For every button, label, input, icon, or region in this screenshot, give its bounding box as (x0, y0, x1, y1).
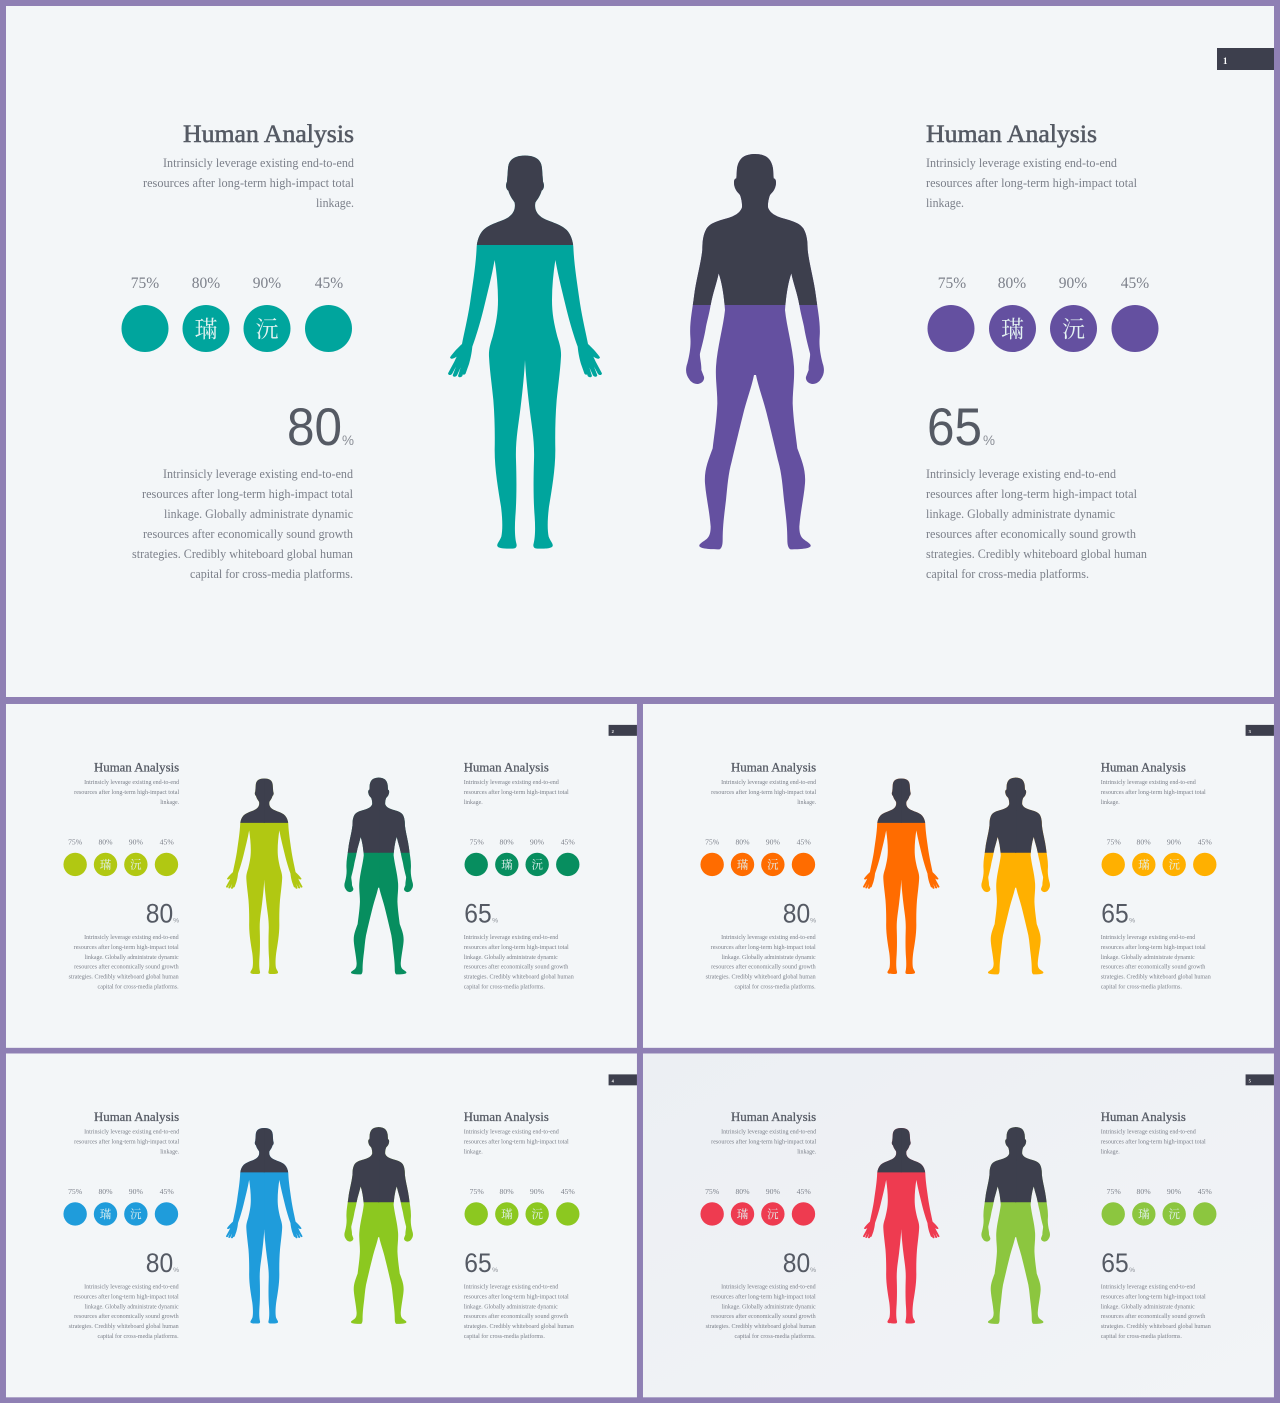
right body text: linkage. Globally administrate dynamic (464, 954, 558, 961)
right body text (1101, 1283, 1211, 1340)
right percentage circles: 沅 (1062, 317, 1085, 342)
left percentage circles (700, 837, 815, 876)
right body text: resources after long-term high-impact total (464, 944, 569, 951)
left percentage circles: 璊 (194, 317, 218, 342)
left percentage circles: 45% (160, 1187, 174, 1196)
left body text: linkage. Globally administrate dynamic (85, 954, 179, 961)
left percentage circles: 75% (68, 1187, 83, 1196)
left body text: strategies. Credibly whiteboard global human (132, 546, 353, 561)
right percentage circles: 90% (530, 837, 545, 846)
panel: slide 1 (6, 6, 1274, 697)
left body text: linkage. Globally administrate dynamic (85, 1303, 179, 1310)
right big number: 65 (1101, 898, 1129, 928)
female body figure (226, 778, 303, 974)
right percentage circles: 45% (1198, 1187, 1212, 1196)
left percentage circles: 75% (705, 837, 720, 846)
right body text: resources after long-term high-impact total (926, 486, 1137, 501)
right percentage circles (928, 275, 1158, 352)
right body text: capital for cross-media platforms. (1101, 1333, 1182, 1340)
right intro text: linkage. (926, 195, 964, 210)
left percentage circles: 90% (129, 1187, 143, 1196)
male body figure (344, 778, 413, 974)
right body text: linkage. Globally administrate dynamic (464, 1303, 558, 1310)
left intro text (711, 779, 817, 806)
panel: slide 4 blue and green (6, 1053, 637, 1397)
right body text: linkage. Globally administrate dynamic (1101, 1303, 1195, 1310)
female body figure (226, 1128, 303, 1324)
left big number: % (810, 1267, 816, 1274)
right body text: linkage. Globally administrate dynamic (1101, 954, 1195, 961)
right percentage circles: 90% (1059, 275, 1087, 292)
left percentage circles (63, 1187, 178, 1226)
right percentage circles: 璊 (1138, 1207, 1150, 1221)
left percentage circles (700, 1187, 815, 1226)
panel: slide 5 red and green (643, 1053, 1274, 1397)
male body figure (981, 1127, 1050, 1324)
left body text: Intrinsicly leverage existing end-to-end (84, 934, 179, 941)
left body text: strategies. Credibly whiteboard global human (706, 1323, 816, 1330)
left percentage circles: 璊 (100, 1207, 112, 1221)
right percentage circles: 75% (938, 275, 966, 292)
left body text (706, 1283, 816, 1340)
left body text: resources after long-term high-impact total (711, 944, 816, 951)
left body text: strategies. Credibly whiteboard global human (69, 974, 179, 981)
right percentage circles (1102, 837, 1216, 876)
right body text: Intrinsicly leverage existing end-to-end (1101, 934, 1196, 941)
left body text: resources after economically sound growth (711, 964, 816, 971)
right body text: Intrinsicly leverage existing end-to-end (1101, 1283, 1196, 1290)
right big number: % (1129, 1267, 1135, 1274)
left intro text: resources after long-term high-impact total (74, 1139, 179, 1146)
left heading: Human Analysis (731, 761, 816, 775)
right big number: 65 (1101, 1248, 1129, 1278)
page tag 3 (1246, 725, 1274, 736)
left big number: % (173, 1267, 179, 1274)
right intro text (926, 155, 1137, 210)
right percentage circles: 90% (1167, 837, 1182, 846)
left percentage circles: 璊 (737, 858, 749, 872)
page tag 2: 2 (612, 729, 615, 734)
right big number: 65 (927, 398, 982, 457)
left percentage circles: 璊 (737, 1207, 749, 1221)
right intro text: resources after long-term high-impact total (464, 1139, 569, 1146)
right percentage circles: 90% (1167, 1187, 1182, 1196)
right heading: Human Analysis (464, 1110, 549, 1124)
right percentage circles: 80% (1137, 1187, 1151, 1196)
page tag 1: 1 (1223, 56, 1228, 66)
left percentage circles: 80% (98, 837, 113, 846)
left percentage circles: 45% (797, 837, 811, 846)
left intro text: resources after long-term high-impact total (143, 175, 354, 190)
right body text: Intrinsicly leverage existing end-to-end (464, 1283, 559, 1290)
right percentage circles: 45% (1121, 275, 1149, 292)
left percentage circles: 沅 (767, 1208, 779, 1221)
left body text (69, 1283, 179, 1340)
left body text: capital for cross-media platforms. (98, 1333, 179, 1340)
page tag 1 (1217, 48, 1274, 70)
right body text: resources after economically sound growth (464, 964, 569, 971)
left intro text (711, 1129, 817, 1156)
right percentage circles: 45% (561, 1187, 575, 1196)
left body text (706, 934, 816, 991)
left percentage circles: 80% (735, 1187, 750, 1196)
left big number: % (810, 917, 816, 924)
right big number: % (492, 917, 498, 924)
left body text (69, 934, 179, 991)
right percentage circles (465, 837, 579, 876)
left heading: Human Analysis (731, 1110, 816, 1124)
right body text: resources after economically sound growth (1101, 1313, 1206, 1320)
left percentage circles: 90% (766, 1187, 780, 1196)
right percentage circles: 沅 (531, 859, 543, 872)
right heading: Human Analysis (464, 761, 549, 775)
right intro text: Intrinsicly leverage existing end-to-end (1101, 779, 1197, 786)
left percentage circles: 45% (797, 1187, 811, 1196)
left intro text: linkage. (160, 1149, 180, 1156)
left big number: 80 (146, 1248, 173, 1278)
page tag 5 (1246, 1074, 1274, 1085)
female body figure (863, 1128, 940, 1324)
right intro text: Intrinsicly leverage existing end-to-end (926, 155, 1117, 170)
left percentage circles: 75% (131, 275, 159, 292)
left intro text: Intrinsicly leverage existing end-to-end (721, 779, 817, 786)
left intro text (143, 155, 354, 210)
left big number: 80 (783, 1248, 810, 1278)
right body text: resources after long-term high-impact total (464, 1293, 569, 1300)
left heading: Human Analysis (183, 121, 354, 148)
right body text: resources after long-term high-impact total (1101, 944, 1206, 951)
left percentage circles: 璊 (100, 858, 112, 872)
left percentage circles: 80% (98, 1187, 113, 1196)
left percentage circles: 75% (68, 837, 83, 846)
right body text: linkage. Globally administrate dynamic (926, 506, 1115, 521)
right intro text: linkage. (1101, 1149, 1120, 1156)
left percentage circles: 75% (705, 1187, 720, 1196)
right intro text: Intrinsicly leverage existing end-to-end (1101, 1129, 1197, 1136)
right intro text: Intrinsicly leverage existing end-to-end (464, 779, 560, 786)
male body figure (686, 154, 824, 549)
left percentage circles (63, 837, 178, 876)
left big number: 80 (146, 898, 173, 928)
right body text: capital for cross-media platforms. (464, 984, 545, 991)
left body text: linkage. Globally administrate dynamic (164, 506, 353, 521)
left percentage circles: 80% (192, 275, 220, 292)
right heading: Human Analysis (1101, 761, 1186, 775)
left intro text: Intrinsicly leverage existing end-to-end (84, 779, 180, 786)
right intro text (464, 1129, 569, 1156)
right big number: % (492, 1267, 498, 1274)
right body text: strategies. Credibly whiteboard global human (1101, 974, 1211, 981)
right intro text: resources after long-term high-impact total (1101, 789, 1206, 796)
right percentage circles: 沅 (1168, 1208, 1180, 1221)
left intro text: linkage. (797, 1149, 817, 1156)
left intro text: resources after long-term high-impact total (711, 1139, 816, 1146)
right intro text: linkage. (464, 1149, 483, 1156)
left body text (132, 466, 353, 581)
right percentage circles: 璊 (1001, 317, 1024, 342)
left body text: Intrinsicly leverage existing end-to-end (163, 466, 353, 481)
page tag 3: 3 (1249, 729, 1252, 734)
left body text: capital for cross-media platforms. (190, 566, 353, 581)
left body text: Intrinsicly leverage existing end-to-end (84, 1283, 179, 1290)
right percentage circles: 90% (530, 1187, 545, 1196)
left percentage circles (122, 275, 352, 352)
left body text: resources after long-term high-impact total (711, 1293, 816, 1300)
left percentage circles: 沅 (767, 859, 779, 872)
left percentage circles: 沅 (130, 1208, 142, 1221)
female body figure (448, 156, 602, 549)
left intro text: Intrinsicly leverage existing end-to-end (163, 155, 354, 170)
left percentage circles: 80% (735, 837, 750, 846)
left body text: strategies. Credibly whiteboard global human (69, 1323, 179, 1330)
right body text: capital for cross-media platforms. (1101, 984, 1182, 991)
left heading: Human Analysis (94, 761, 179, 775)
left percentage circles: 90% (766, 837, 780, 846)
left intro text (74, 1129, 180, 1156)
left big number: % (342, 433, 354, 448)
right body text: resources after economically sound growth (464, 1313, 569, 1320)
left heading: Human Analysis (94, 1110, 179, 1124)
left percentage circles: 45% (315, 275, 343, 292)
right percentage circles: 75% (470, 1187, 484, 1196)
right body text: resources after economically sound growth (1101, 964, 1206, 971)
right body text: capital for cross-media platforms. (926, 566, 1089, 581)
right intro text (1101, 779, 1206, 806)
right body text (1101, 934, 1211, 991)
right body text (464, 934, 574, 991)
right heading: Human Analysis (1101, 1110, 1186, 1124)
male body figure (981, 778, 1050, 974)
female body figure (863, 778, 940, 974)
left percentage circles: 沅 (256, 317, 278, 342)
right percentage circles (465, 1187, 579, 1226)
panel: slide 3 orange and amber (643, 704, 1274, 1048)
right body text: strategies. Credibly whiteboard global human (464, 974, 574, 981)
left percentage circles: 90% (129, 837, 143, 846)
right body text: strategies. Credibly whiteboard global human (1101, 1323, 1211, 1330)
left body text: Intrinsicly leverage existing end-to-end (721, 934, 816, 941)
right percentage circles: 45% (561, 837, 575, 846)
right percentage circles: 80% (1137, 837, 1151, 846)
left big number: 80 (783, 898, 810, 928)
right intro text: resources after long-term high-impact total (926, 175, 1137, 190)
right percentage circles: 璊 (501, 1207, 513, 1221)
left body text: resources after long-term high-impact total (142, 486, 353, 501)
right big number: 65 (464, 1248, 492, 1278)
right body text: Intrinsicly leverage existing end-to-end (926, 466, 1116, 481)
left body text: strategies. Credibly whiteboard global human (706, 974, 816, 981)
left intro text: resources after long-term high-impact total (711, 789, 816, 796)
page tag 4: 4 (612, 1078, 615, 1083)
right percentage circles: 80% (500, 1187, 514, 1196)
left body text: resources after economically sound growth (143, 526, 353, 541)
left body text: capital for cross-media platforms. (735, 1333, 816, 1340)
right intro text: linkage. (464, 799, 483, 806)
page tag 4 (609, 1074, 637, 1085)
right intro text: linkage. (1101, 799, 1120, 806)
left body text: resources after long-term high-impact total (74, 1293, 179, 1300)
right intro text (464, 779, 569, 806)
right big number: 65 (464, 898, 492, 928)
right body text: strategies. Credibly whiteboard global human (926, 546, 1147, 561)
left body text: resources after economically sound growth (74, 964, 179, 971)
right body text: strategies. Credibly whiteboard global human (464, 1323, 574, 1330)
right percentage circles: 45% (1198, 837, 1212, 846)
left body text: capital for cross-media platforms. (98, 984, 179, 991)
page tag 2 (609, 725, 637, 736)
right percentage circles (1102, 1187, 1216, 1226)
left intro text: Intrinsicly leverage existing end-to-end (721, 1129, 817, 1136)
left body text: resources after economically sound growth (711, 1313, 816, 1320)
male body figure (344, 1127, 413, 1324)
right body text: capital for cross-media platforms. (464, 1333, 545, 1340)
right intro text: Intrinsicly leverage existing end-to-end (464, 1129, 560, 1136)
panel: slide 2 lime and green (6, 704, 637, 1048)
page tag 5: 5 (1249, 1078, 1252, 1083)
right body text (464, 1283, 574, 1340)
right body text: resources after long-term high-impact total (1101, 1293, 1206, 1300)
right body text: Intrinsicly leverage existing end-to-end (464, 934, 559, 941)
left intro text: linkage. (797, 799, 817, 806)
right percentage circles: 80% (998, 275, 1026, 292)
right intro text: resources after long-term high-impact total (464, 789, 569, 796)
left body text: resources after economically sound growth (74, 1313, 179, 1320)
left intro text: linkage. (160, 799, 180, 806)
right percentage circles: 沅 (531, 1208, 543, 1221)
left body text: Intrinsicly leverage existing end-to-end (721, 1283, 816, 1290)
left big number: 80 (287, 398, 342, 457)
left percentage circles: 沅 (130, 859, 142, 872)
left intro text: linkage. (316, 195, 354, 210)
right body text: resources after economically sound growth (926, 526, 1136, 541)
right intro text (1101, 1129, 1206, 1156)
left intro text (74, 779, 180, 806)
right percentage circles: 璊 (1138, 858, 1150, 872)
left body text: linkage. Globally administrate dynamic (722, 1303, 816, 1310)
right percentage circles: 80% (500, 837, 514, 846)
right percentage circles: 75% (1107, 837, 1121, 846)
right intro text: resources after long-term high-impact total (1101, 1139, 1206, 1146)
left body text: linkage. Globally administrate dynamic (722, 954, 816, 961)
right percentage circles: 璊 (501, 858, 513, 872)
left body text: capital for cross-media platforms. (735, 984, 816, 991)
right percentage circles: 75% (470, 837, 484, 846)
right percentage circles: 75% (1107, 1187, 1121, 1196)
left intro text: resources after long-term high-impact total (74, 789, 179, 796)
right percentage circles: 沅 (1168, 859, 1180, 872)
left percentage circles: 90% (253, 275, 281, 292)
left intro text: Intrinsicly leverage existing end-to-end (84, 1129, 180, 1136)
right heading: Human Analysis (926, 121, 1097, 148)
left percentage circles: 45% (160, 837, 174, 846)
right body text (926, 466, 1147, 581)
left body text: resources after long-term high-impact total (74, 944, 179, 951)
right big number: % (1129, 917, 1135, 924)
right big number: % (983, 433, 995, 448)
left big number: % (173, 917, 179, 924)
